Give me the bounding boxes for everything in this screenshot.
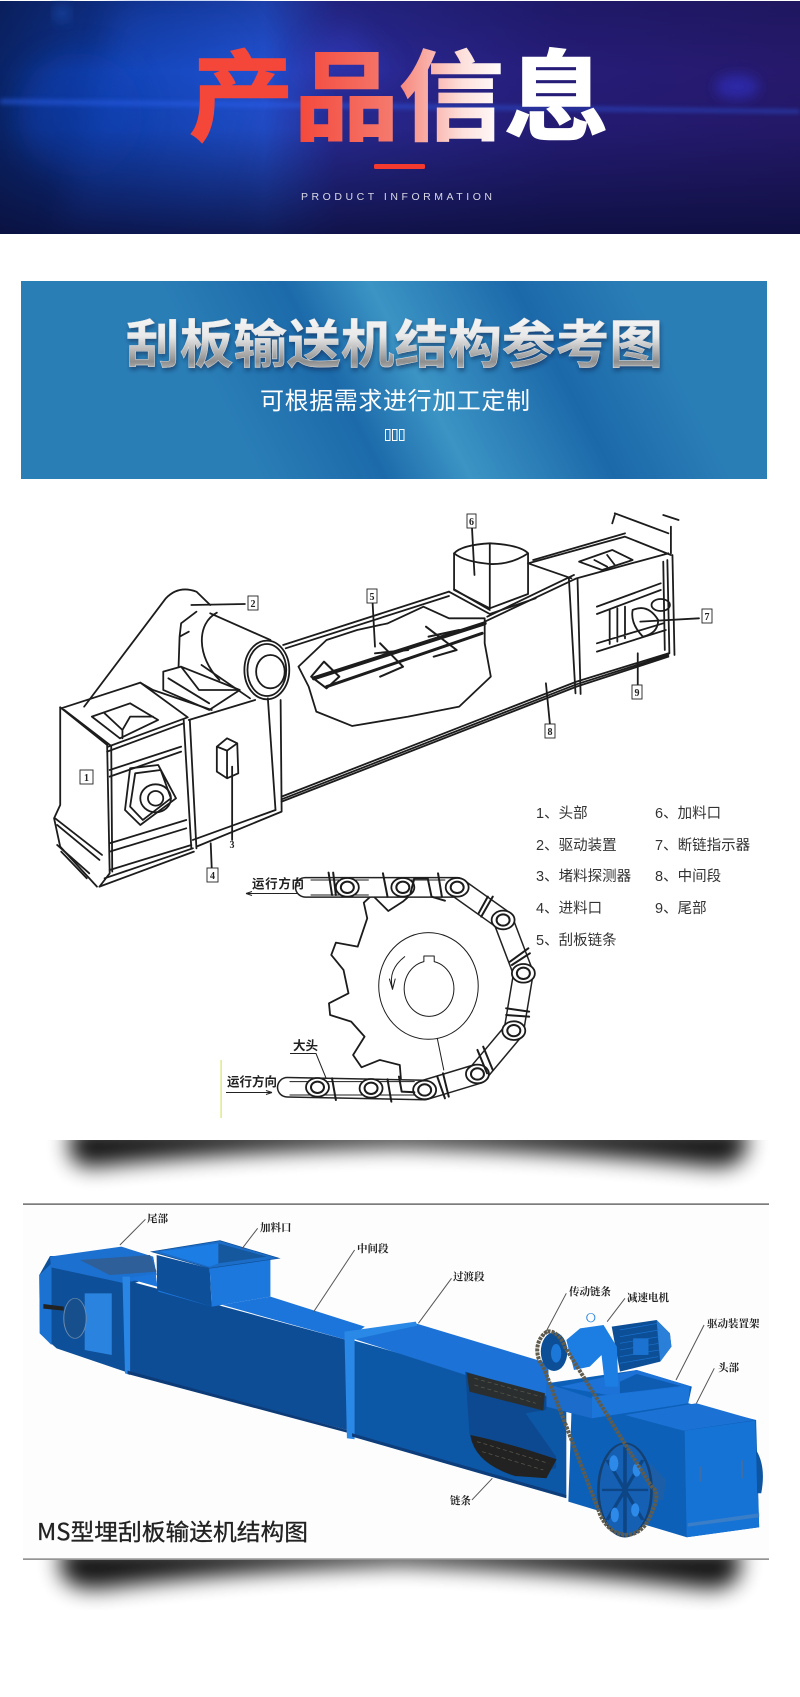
direction labels (226, 873, 326, 1094)
direction labels: 运行方向 (227, 1071, 277, 1090)
callout numbers: 4 (210, 871, 215, 882)
machine part labels: 过渡段 (453, 1270, 485, 1283)
callout numbers: 6 (469, 517, 474, 528)
legend: parts list: 5、刮板链条 (536, 931, 617, 949)
callout numbers: 8 (548, 727, 552, 738)
callout numbers: 3 (230, 840, 234, 851)
drive motor and belt guard (84, 589, 289, 710)
level detector box (191, 604, 699, 868)
legend: parts list: 4、进料口 (536, 900, 602, 917)
middle section two (344, 1322, 566, 1498)
machine part labels: 传动链条 (569, 1285, 611, 1298)
scraper chain cutout (298, 600, 491, 726)
legend: parts list (536, 805, 751, 949)
direction labels: 运行方向 (252, 873, 304, 892)
legend: parts list: 9、尾部 (655, 900, 707, 917)
machine part labels: 减速电机 (627, 1291, 669, 1304)
subtitle: english: PRODUCT INFORMATION (301, 191, 492, 203)
red underline (374, 164, 425, 169)
callout numbers: 5 (370, 592, 374, 603)
banner panel (21, 281, 767, 479)
drive frame (546, 1370, 692, 1418)
leader lines (120, 1219, 714, 1500)
drop shadow 2 (60, 1548, 740, 1589)
legend: parts list: 6、加料口 (655, 805, 721, 822)
legend: parts list: 7、断链指示器 (655, 837, 751, 854)
machine part labels: 尾部 (147, 1212, 168, 1225)
machine part labels: 链条 (450, 1494, 471, 1507)
callout numbers: 2 (250, 599, 256, 610)
drop shadow 1 (69, 1128, 747, 1167)
legend: parts list: 1、头部 (536, 805, 588, 822)
banner subtitle: 可根据需求进行加工定制 (260, 381, 530, 416)
machine caption: MS型埋刮板输送机结构图 (37, 1513, 308, 1547)
tail section (39, 1247, 157, 1372)
callout numbers: 9 (634, 688, 640, 699)
head box (54, 683, 194, 887)
callout numbers: 1 (84, 773, 89, 784)
drive chain loop (537, 1331, 656, 1537)
callout numbers (80, 514, 712, 882)
diagram: conveyor line drawing (54, 513, 712, 887)
legend: parts list: 3、堵料探测器 (536, 868, 632, 885)
yellow marker line (220, 1060, 222, 1118)
legend: parts list: 2、驱动装置 (536, 837, 617, 854)
banner title: 刮板输送机结构参考图 (126, 303, 663, 378)
chain band (287, 880, 523, 1095)
diagram: sprocket and chain (220, 873, 535, 1118)
legend: parts list: 8、中间段 (655, 868, 721, 885)
head section (546, 1370, 763, 1537)
hopper (449, 527, 536, 614)
middle section one (122, 1273, 365, 1433)
chain links and pins (306, 878, 535, 1099)
hopper (152, 1241, 279, 1307)
main body lines (184, 513, 679, 848)
header panel (0, 1, 800, 234)
sprocket wheel (329, 895, 478, 1092)
machine part labels: 中间段 (357, 1242, 389, 1255)
placeholder glyph boxes (386, 430, 404, 440)
chain window (465, 1372, 557, 1478)
title: product information: 产品信息 (189, 19, 609, 161)
machine part labels: 加料口 (260, 1221, 292, 1234)
machine part labels: 驱动装置架 (707, 1317, 760, 1330)
machine part labels (147, 1212, 760, 1507)
panel: blue conveyor photo (23, 1204, 769, 1560)
machine part labels: 头部 (718, 1361, 739, 1374)
callout numbers: 7 (704, 612, 710, 623)
motor and reducer (566, 1313, 671, 1387)
direction labels: 大头 (293, 1035, 318, 1054)
scraper bars (329, 873, 530, 1102)
